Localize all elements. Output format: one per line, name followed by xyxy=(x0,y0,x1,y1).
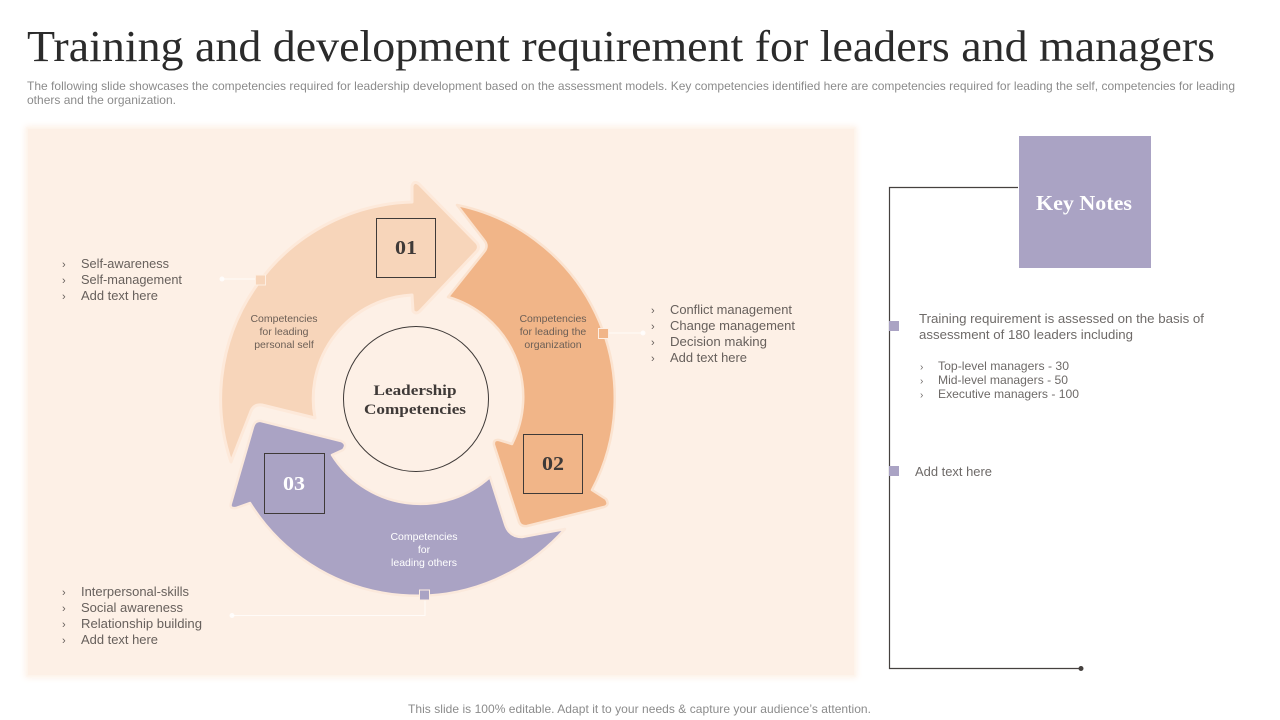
title: Training and development requirement for leaders and managers xyxy=(27,22,1215,71)
bullet list: leading the organization: Add text here xyxy=(670,351,747,365)
bullet list: leading the organization: Conflict management xyxy=(670,303,793,317)
label: leading the organization: for leading the xyxy=(520,326,586,338)
center circle xyxy=(344,326,488,472)
bullet list: leading self: Self-awareness xyxy=(81,257,169,271)
bullet list: leading others: Social awareness xyxy=(81,601,183,615)
bullet list: leading self: Add text here xyxy=(81,289,158,303)
number box 01 xyxy=(376,218,436,278)
number box 02 xyxy=(524,434,582,494)
bullet list: leading self: › xyxy=(62,291,66,303)
subtitle description: others and the organization. xyxy=(27,93,176,107)
bullet list: leading self xyxy=(62,257,183,303)
label: leading others: for xyxy=(418,544,431,556)
arrow 03: leading others xyxy=(231,421,565,596)
label: leading the organization: organization xyxy=(524,339,582,351)
list: manager counts: › xyxy=(920,362,923,373)
panel: key notes xyxy=(889,136,1205,671)
label: leading personal self: for leading xyxy=(259,326,309,338)
number box 02: 02 xyxy=(542,453,564,475)
text: training requirement: Training requirement is assessed on the basis of xyxy=(919,312,1205,326)
text: add text here: Add text here xyxy=(915,465,992,479)
connector: self xyxy=(220,275,266,285)
bullet list: leading the organization: › xyxy=(651,337,655,349)
bullet list: leading the organization xyxy=(651,303,796,365)
list: manager counts: Top-level managers - 30 xyxy=(938,359,1069,373)
bullet list: leading others: › xyxy=(62,587,66,599)
bullet list: leading others: › xyxy=(62,619,66,631)
list: manager counts: Mid-level managers - 50 xyxy=(938,373,1068,387)
bullet list: leading others: Relationship building xyxy=(81,617,202,631)
list: manager counts: › xyxy=(920,376,923,387)
label: leading personal self: Competencies xyxy=(250,313,318,325)
text: training requirement: assessment of 180 leaders including xyxy=(919,328,1133,342)
panel: leadership competencies xyxy=(25,126,857,678)
number box 03 xyxy=(264,454,324,514)
bullet list: leading self: Self-management xyxy=(81,273,183,287)
key notes bracket line xyxy=(890,188,1084,671)
label: leading others xyxy=(390,531,458,569)
footer note: This slide is 100% editable. Adapt it to your needs & capture your audience’s attention. xyxy=(408,702,871,716)
arrow 02: leading the organization xyxy=(448,205,615,526)
connector: others xyxy=(230,590,430,618)
arrow 01: leading personal self xyxy=(221,182,478,462)
marker: add text xyxy=(889,466,899,476)
key notes heading box xyxy=(1019,136,1151,268)
bullet list: leading the organization: › xyxy=(651,353,655,365)
number box 01: 01 xyxy=(395,237,417,259)
bullet list: leading the organization: Change management xyxy=(670,319,796,333)
connector: organization xyxy=(598,328,646,338)
subtitle description xyxy=(27,79,1235,107)
bullet list: leading others: Add text here xyxy=(81,633,158,647)
bullet list: leading others: › xyxy=(62,603,66,615)
list: manager counts: › xyxy=(920,390,923,401)
list: manager counts: Executive managers - 100 xyxy=(938,387,1079,401)
center circle: Competencies xyxy=(364,402,466,418)
number box 03: 03 xyxy=(283,473,305,495)
label: leading personal self: personal self xyxy=(254,339,314,351)
text: training requirement xyxy=(919,312,1205,342)
label: leading the organization xyxy=(519,313,587,351)
bullet list: leading the organization: Decision making xyxy=(670,335,767,349)
bullet list: leading others xyxy=(62,585,202,647)
label: leading others: leading others xyxy=(391,557,457,569)
label: leading the organization: Competencies xyxy=(519,313,587,325)
label: leading personal self xyxy=(250,313,318,351)
subtitle description: The following slide showcases the competencies required for leadership development based on the assessment models. Key competencies identified here are competencies required for leading the self, competencies for leading xyxy=(27,79,1235,93)
center circle: Leadership xyxy=(374,383,456,399)
bullet list: leading the organization: › xyxy=(651,321,655,333)
bullet list: leading self: › xyxy=(62,275,66,287)
list: manager counts xyxy=(920,359,1079,401)
bullet list: leading others: Interpersonal-skills xyxy=(81,585,189,599)
bullet list: leading the organization: › xyxy=(651,305,655,317)
key notes heading box: Key Notes xyxy=(1036,191,1132,215)
label: leading others: Competencies xyxy=(390,531,458,543)
bullet list: leading others: › xyxy=(62,635,66,647)
marker: training requirement xyxy=(889,321,899,331)
bullet list: leading self: › xyxy=(62,259,66,271)
